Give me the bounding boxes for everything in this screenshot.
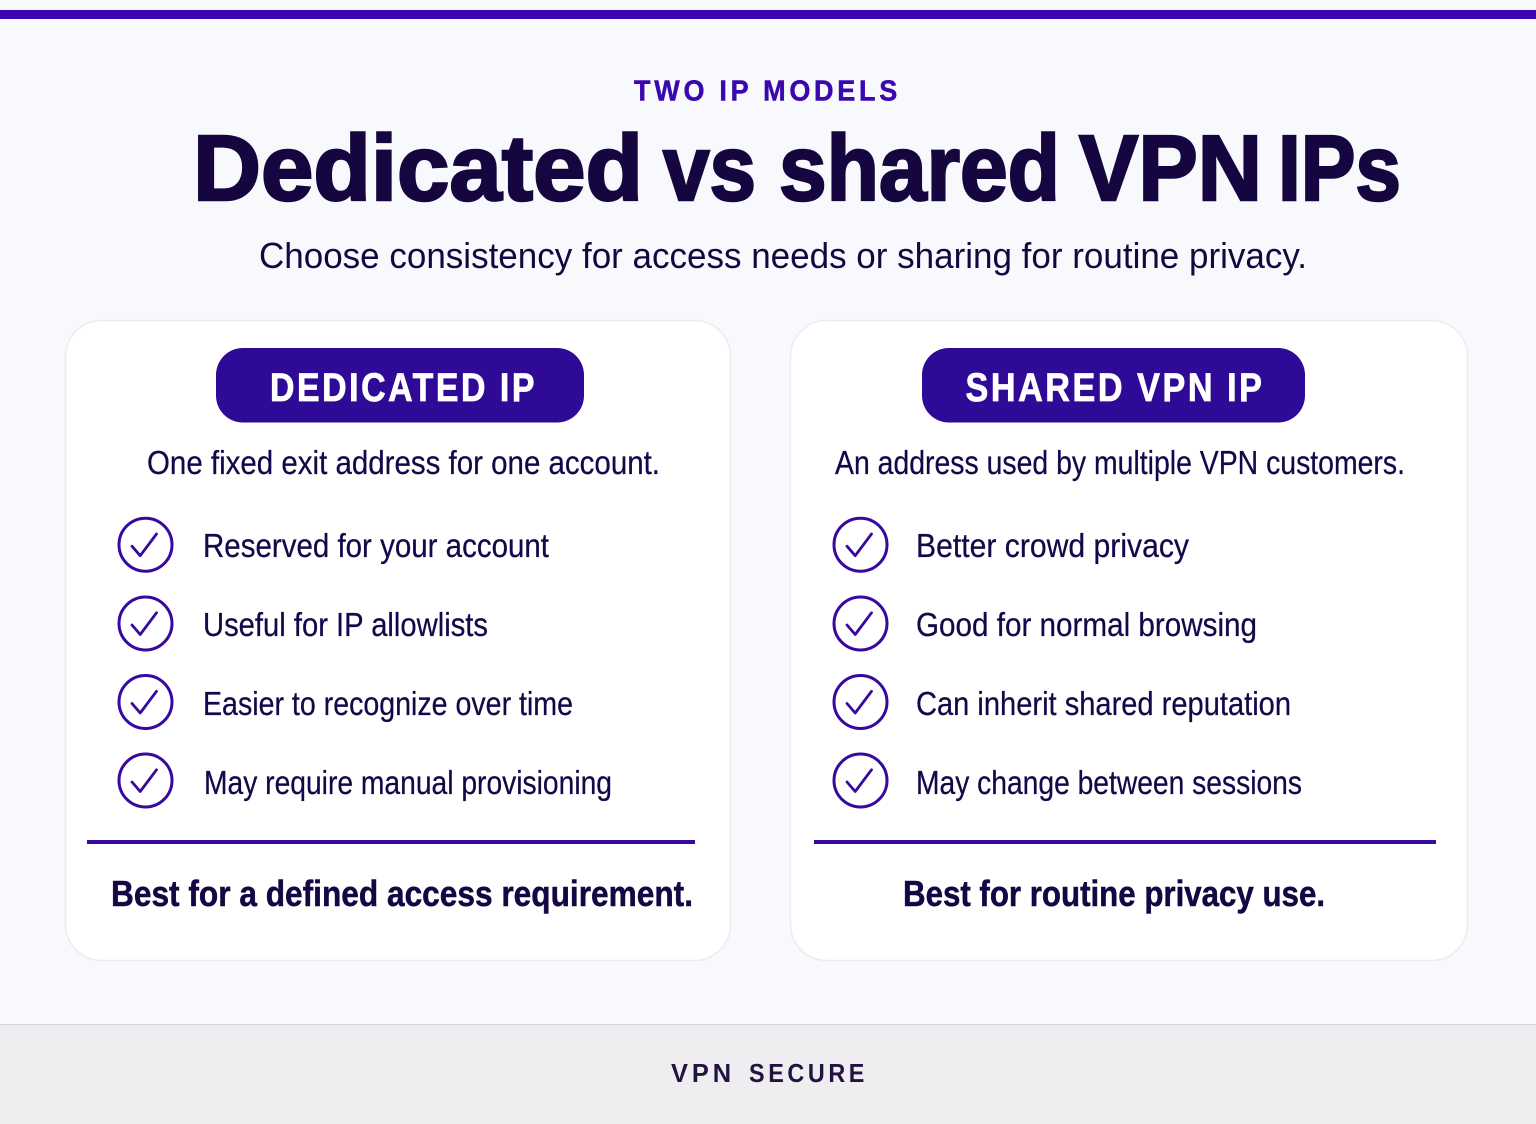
title: shared [779, 116, 1060, 220]
title: IPs [1278, 116, 1401, 220]
list item: provisioning [119, 754, 612, 807]
kicker: TWO IP MODELS [634, 76, 901, 108]
footer brand: SECURE [749, 1058, 868, 1088]
list item: recognize: Easier to recognize over time [203, 685, 573, 722]
title: vs [663, 116, 756, 220]
pill heading: SHARED VPN IP [966, 366, 1264, 410]
list item: sessions [834, 754, 1302, 807]
footer brand: VPN [671, 1058, 735, 1088]
top accent bar [0, 10, 1536, 19]
panel: shared VPN IP [790, 320, 1468, 960]
list item: shared reputation: Can inherit shared reputation [916, 685, 1291, 722]
list item: crowd privacy [834, 518, 1189, 571]
pill heading [216, 348, 584, 422]
title: VPN [1079, 116, 1262, 220]
description: An address used by multiple VPN customers. [835, 444, 1405, 481]
list item: recognize [119, 676, 573, 728]
list item: shared reputation [834, 676, 1291, 728]
list item: normal browsing [834, 597, 1257, 650]
pill heading: DEDICATED IP [270, 366, 537, 410]
list item: provisioning: May require manual provisioning [204, 764, 612, 801]
list item: crowd privacy: Better crowd privacy [916, 527, 1189, 564]
pill heading [922, 348, 1305, 422]
card background [790, 320, 1468, 960]
list item: sessions: May change between sessions [916, 764, 1302, 801]
list item: reserved: Reserved for your account [203, 527, 549, 564]
footer band [0, 1024, 1536, 1124]
list item: allowlists [119, 597, 488, 650]
footer brand [671, 1058, 868, 1088]
title [193, 116, 1401, 220]
best-for statement: Best for routine privacy use. [903, 873, 1325, 914]
card background [66, 320, 730, 960]
best-for statement: Best for a defined access requirement. [111, 873, 693, 914]
title: Dedicated [193, 116, 643, 220]
list item: allowlists: Useful for IP allowlists [203, 606, 488, 643]
subtitle: Choose consistency for access needs or sharing for routine privacy. [259, 235, 1307, 276]
list item: reserved [119, 518, 549, 571]
panel: dedicated IP [66, 320, 730, 960]
description: One fixed exit address for one account. [147, 444, 660, 481]
list item: normal browsing: Good for normal browsing [916, 606, 1257, 643]
